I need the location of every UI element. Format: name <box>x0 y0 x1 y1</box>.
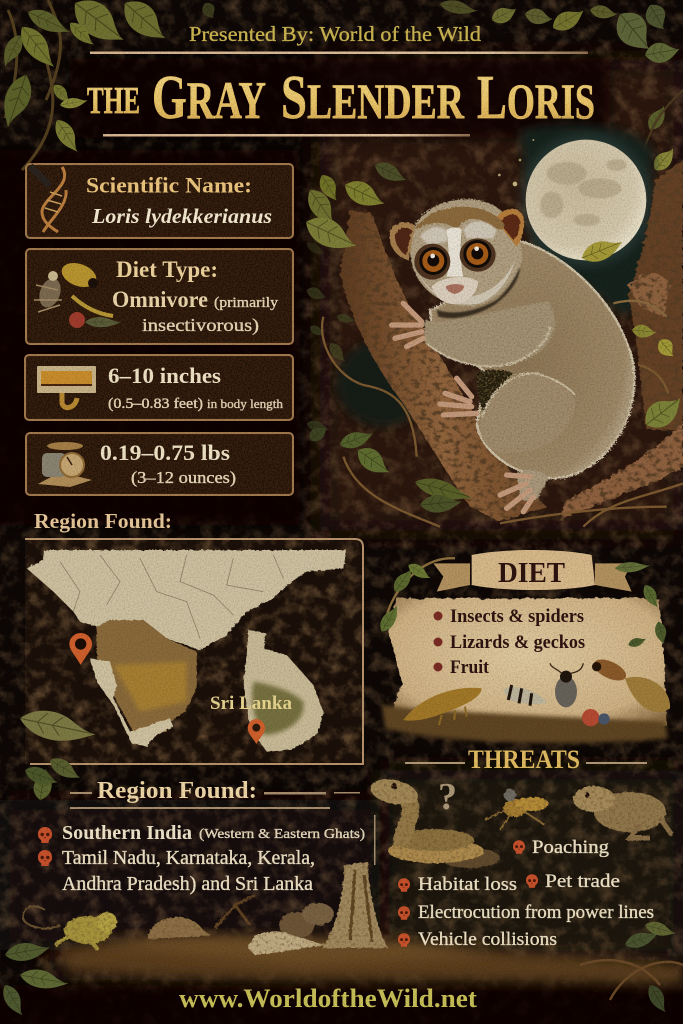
panel: diet type <box>26 249 293 344</box>
map: cracks in northern india <box>60 555 283 638</box>
banner <box>433 550 632 592</box>
threats list <box>418 837 654 950</box>
diet list: Fruit <box>450 657 490 678</box>
icon: measuring scale <box>37 366 96 408</box>
threats list: Vehicle collisions <box>418 929 557 950</box>
body length note: in body length <box>207 396 284 411</box>
loris leg <box>480 373 575 453</box>
foliage: bottom left <box>0 754 84 1019</box>
icon: DNA helix and magnifier <box>30 166 66 232</box>
loris ears <box>389 209 524 260</box>
title rule bottom <box>103 134 470 136</box>
icon: insects and fruit <box>34 259 121 328</box>
heading rules <box>70 792 376 865</box>
vine right <box>615 560 669 649</box>
map: sri lanka pin <box>248 719 265 744</box>
latin name: Loris lydekkerianus <box>91 204 272 228</box>
region line 3: Andhra Pradesh) and Sri Lanka <box>62 873 313 895</box>
length: 6–10 inches <box>108 363 221 388</box>
map: northern india <box>27 550 347 650</box>
loris arm <box>423 302 555 367</box>
icon: grub <box>503 685 547 706</box>
vine left <box>376 558 455 635</box>
diet list: Lizards & geckos <box>450 632 585 653</box>
illustration: snake <box>368 775 500 868</box>
icon: berries <box>582 709 610 726</box>
icon: weighing scale <box>38 442 92 487</box>
moon <box>519 133 653 267</box>
heading: region found: Region Found: <box>34 509 172 533</box>
icon: winged insect <box>591 655 670 712</box>
vines and roots <box>322 301 683 527</box>
right tree trunk <box>628 160 683 430</box>
title: GRAY <box>152 64 266 132</box>
illustration: rocks and bones <box>248 903 334 955</box>
ground scene: forest floor <box>60 937 683 985</box>
title rule top <box>90 52 588 54</box>
foliage: top right leaves <box>439 0 683 175</box>
heading: Region Found: <box>97 778 257 804</box>
illustration: tree stump <box>322 862 388 948</box>
map: southern india range <box>97 620 197 738</box>
loris underbelly shadow <box>477 370 513 417</box>
panel: body length <box>25 355 293 420</box>
threats list: Electrocution from power lines <box>418 902 654 923</box>
dark background bush <box>304 240 356 434</box>
ground <box>382 705 668 743</box>
foliage: bottom right <box>580 919 683 1016</box>
icon: question mark: ? <box>438 776 457 818</box>
map frame <box>25 539 363 764</box>
title <box>87 64 595 132</box>
icon: beetle <box>550 663 583 707</box>
value: Omnivore <box>112 287 208 312</box>
label: Scientific Name: <box>86 172 252 198</box>
panel: scientific name <box>26 164 293 238</box>
region line 2: Tamil Nadu, Karnataka, Kerala, <box>62 847 315 869</box>
map panel <box>17 539 363 764</box>
threats list: Poaching <box>532 837 610 858</box>
panel: weight <box>26 433 293 495</box>
byline: Presented By: World of the Wild <box>189 22 482 46</box>
night sky backdrop <box>337 125 653 427</box>
map: foreground leaf <box>17 705 98 748</box>
region line 1 note: (Western & Eastern Ghats) <box>199 827 365 842</box>
note: (primarily <box>214 295 279 311</box>
section: region found details <box>62 778 376 895</box>
heading: threats: THREATS <box>468 745 580 774</box>
hero scene: loris on a branch under the moon <box>304 125 683 527</box>
map: india pin <box>69 633 92 665</box>
panel: diet <box>376 550 670 743</box>
website footer: www.WorldoftheWild.net <box>179 984 477 1013</box>
label: Diet Type: <box>116 257 218 282</box>
illustration: frog <box>23 906 117 950</box>
diet list: Insects & spiders <box>450 606 584 627</box>
icon: cicada <box>403 688 482 725</box>
loris body <box>410 199 634 500</box>
title: LORIS <box>477 64 595 132</box>
diet list <box>434 606 585 678</box>
heading: DIET <box>498 557 565 589</box>
illustration: wasp <box>485 789 549 830</box>
loris fingers <box>392 303 533 512</box>
foliage: leaves around the hero tree <box>300 158 683 514</box>
map label: Sri Lanka <box>210 693 292 714</box>
main trunk and branch <box>340 210 683 522</box>
skull bullets for the threat and region lists <box>38 827 538 947</box>
threats list: Pet trade <box>545 871 620 892</box>
note continued: insectivorous) <box>142 315 259 336</box>
map: west coast <box>90 658 173 747</box>
weight in ounces: (3–12 ounces) <box>131 468 236 487</box>
map: sri lanka <box>243 630 323 752</box>
title: SLENDER <box>281 64 465 132</box>
weight: 0.19–0.75 lbs <box>100 440 230 465</box>
loris face <box>414 207 515 305</box>
loris head <box>410 199 522 306</box>
length in feet: (0.5–0.83 feet) <box>108 396 203 412</box>
threats list: Habitat loss <box>418 874 517 895</box>
foliage: top left vines and leaves <box>0 0 219 170</box>
illustration: toad <box>573 786 672 838</box>
illustration: tortoise <box>148 895 255 939</box>
title: THE <box>87 80 140 122</box>
region line 1: Southern India <box>62 822 192 844</box>
parchment <box>388 598 667 736</box>
loris neck shadow <box>437 267 520 318</box>
